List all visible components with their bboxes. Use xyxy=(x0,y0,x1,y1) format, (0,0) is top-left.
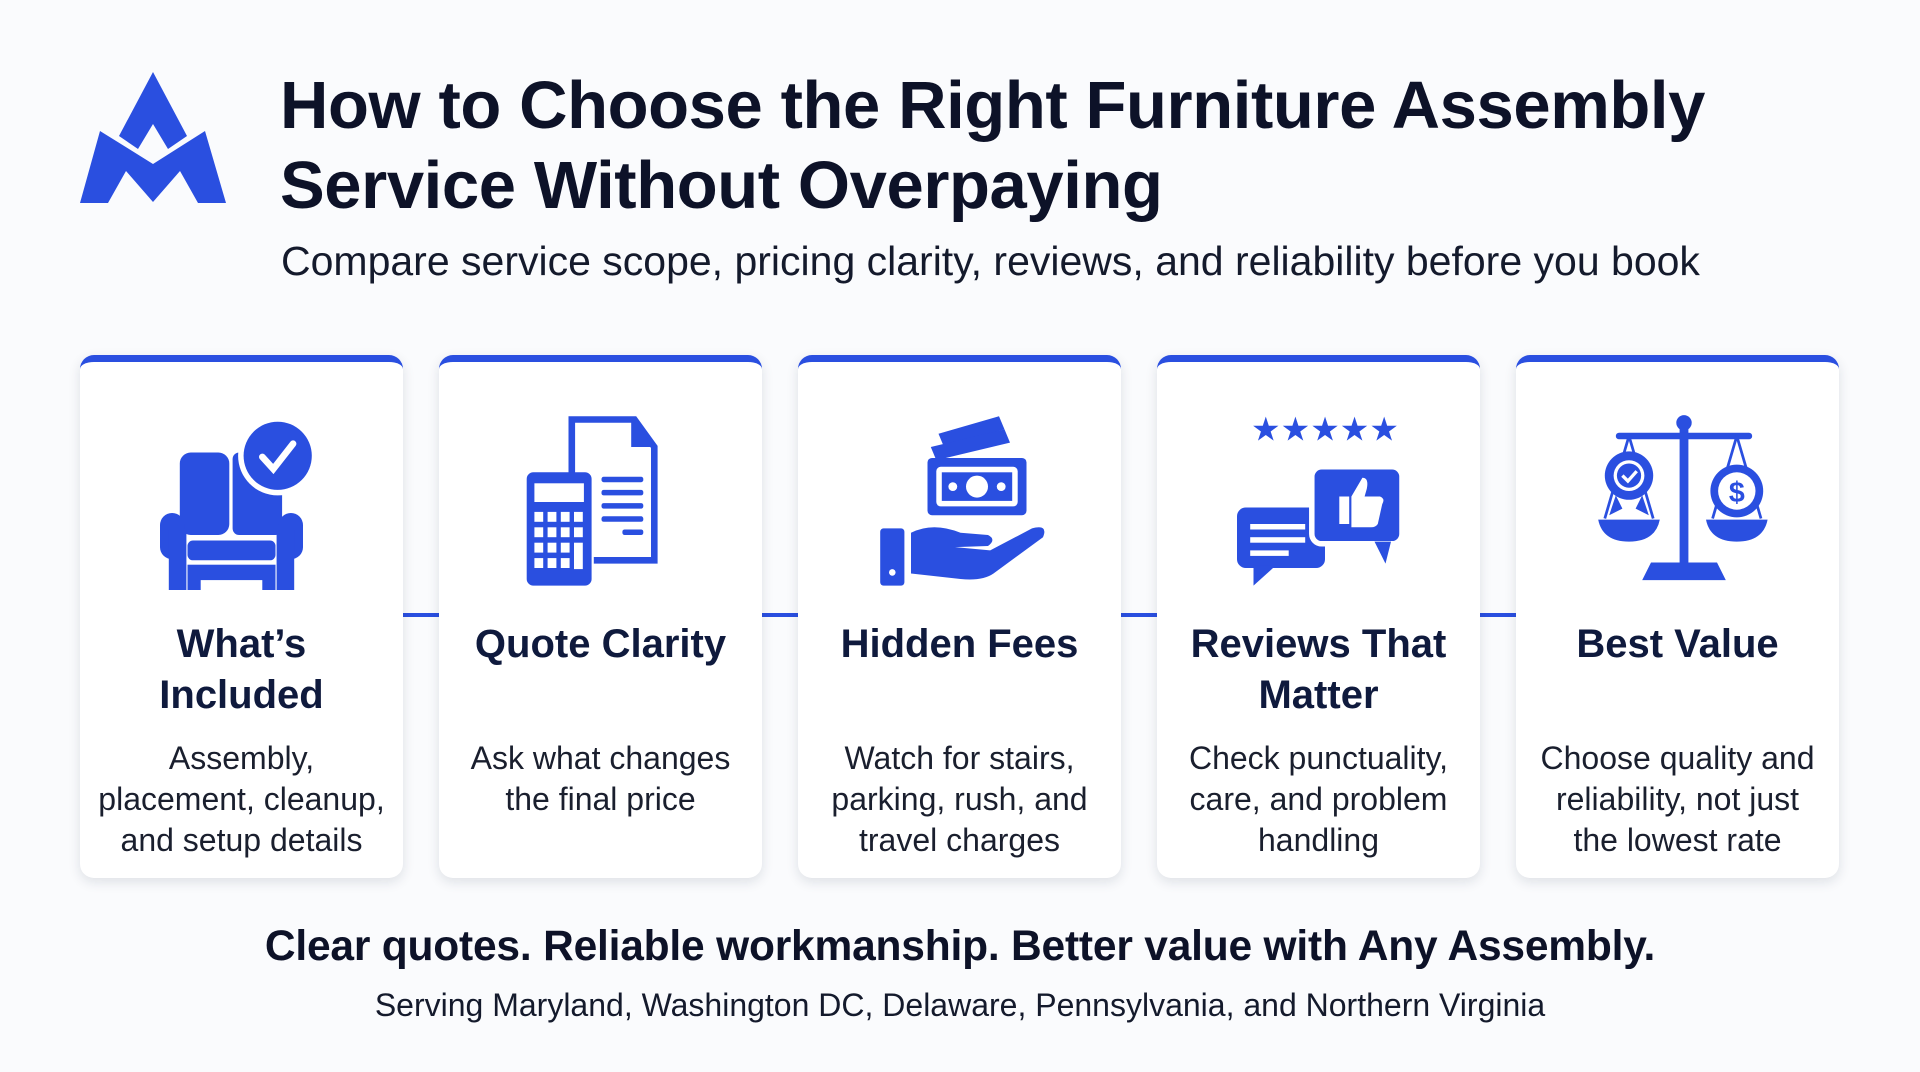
icon: hand with cash xyxy=(880,416,1044,586)
title: Service Without Overpaying xyxy=(280,148,1163,223)
text xyxy=(831,740,1088,858)
icon: balance scale xyxy=(1598,415,1768,580)
card: what's included xyxy=(80,355,403,878)
heading: What’s xyxy=(177,622,306,666)
text xyxy=(470,740,730,817)
logo xyxy=(80,72,226,203)
text: Watch for stairs, xyxy=(845,740,1074,776)
icon: stars and speech bubbles xyxy=(1237,414,1400,586)
service area: Serving Maryland, Washington DC, Delaware, Pennsylvania, and Northern Virginia xyxy=(375,987,1545,1023)
text: travel charges xyxy=(859,822,1060,858)
text: the lowest rate xyxy=(1573,822,1782,858)
heading: Matter xyxy=(1258,673,1379,717)
heading: Best Value xyxy=(1576,622,1779,666)
heading xyxy=(1191,622,1446,717)
heading xyxy=(159,622,324,717)
text: care, and problem xyxy=(1190,781,1447,817)
heading: Included xyxy=(159,673,324,717)
text: Choose quality and xyxy=(1541,740,1814,776)
text: parking, rush, and xyxy=(831,781,1088,817)
text: and setup details xyxy=(121,822,362,858)
subtitle: Compare service scope, pricing clarity, reviews, and reliability before you book xyxy=(281,238,1700,284)
text xyxy=(98,740,385,858)
text: reliability, not just xyxy=(1556,781,1799,817)
text: the final price xyxy=(505,781,696,817)
card: reviews xyxy=(1157,355,1480,878)
icon: balance scale: $ xyxy=(1729,477,1745,509)
card: best value xyxy=(1516,355,1839,878)
title xyxy=(280,68,1705,223)
heading: Reviews That xyxy=(1191,622,1446,666)
icon: armchair with check xyxy=(160,422,312,590)
text: placement, cleanup, xyxy=(98,781,385,817)
text: Check punctuality, xyxy=(1189,740,1448,776)
title: How to Choose the Right Furniture Assembly xyxy=(280,68,1705,143)
connectors xyxy=(400,613,440,617)
card: hidden fees xyxy=(798,355,1121,878)
tagline: Clear quotes. Reliable workmanship. Better value with Any Assembly. xyxy=(265,923,1655,970)
text: Ask what changes xyxy=(471,740,730,776)
card: quote clarity xyxy=(439,355,762,878)
text: handling xyxy=(1258,822,1379,858)
heading: Hidden Fees xyxy=(841,622,1078,666)
text xyxy=(1189,740,1448,858)
text: Assembly, xyxy=(169,740,314,776)
text xyxy=(1541,740,1814,858)
icon: calculator and document xyxy=(526,416,658,586)
heading: Quote Clarity xyxy=(475,622,726,666)
